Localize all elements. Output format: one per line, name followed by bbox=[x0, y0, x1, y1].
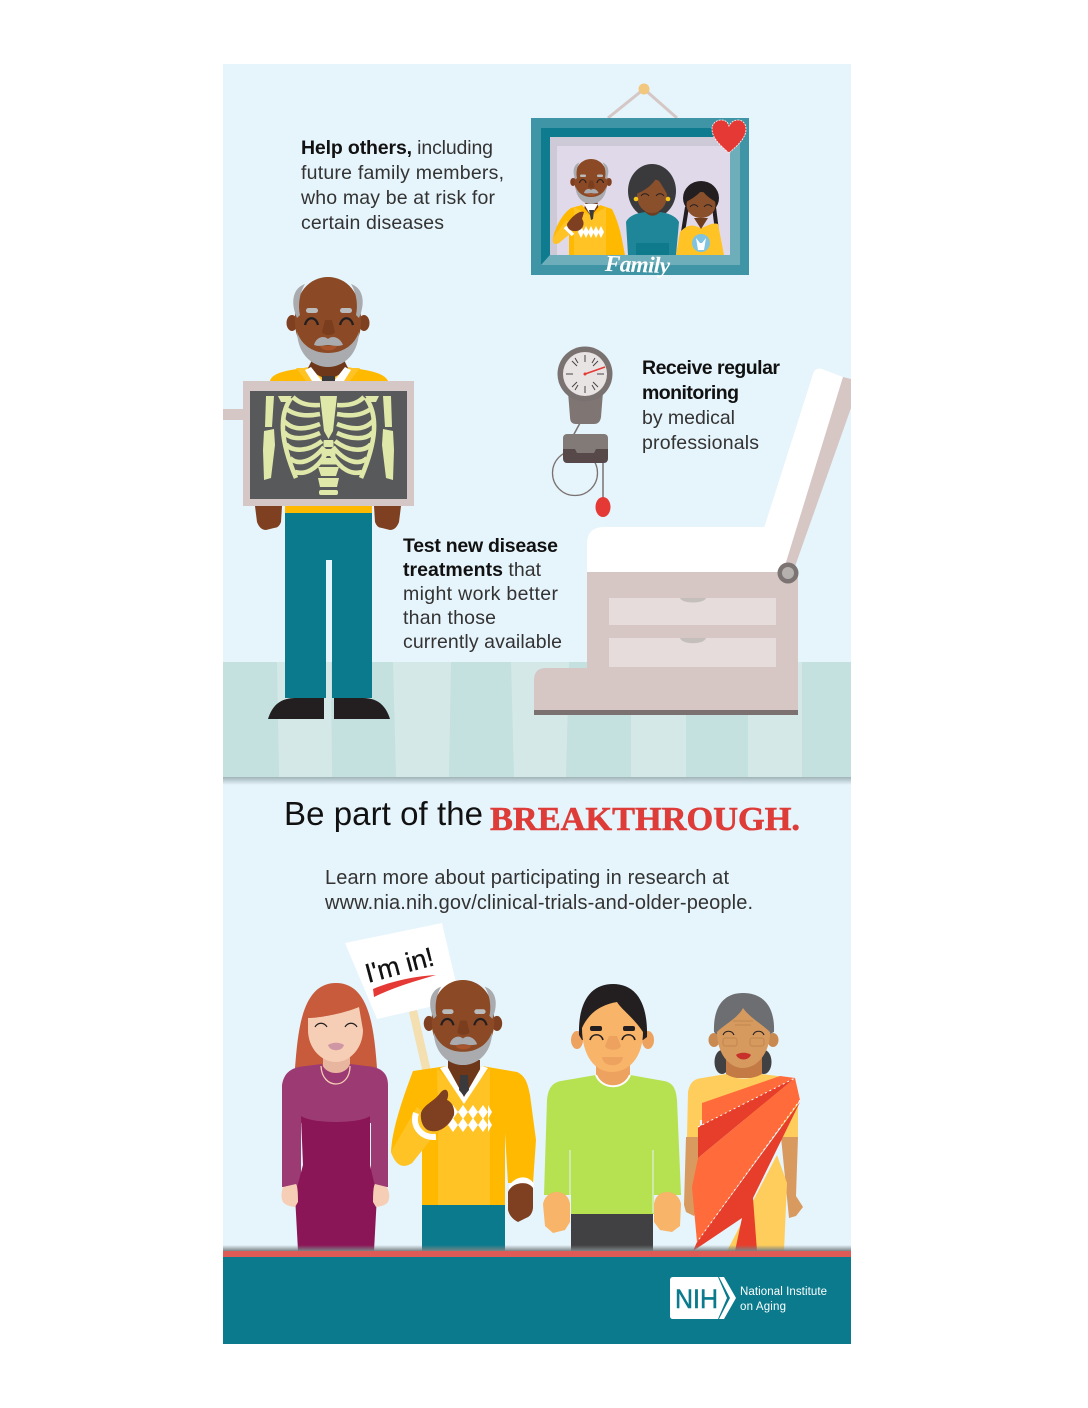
heading bbox=[284, 795, 800, 838]
text: receive regular monitoring: professionals bbox=[642, 432, 759, 454]
text: learn more bbox=[324, 867, 753, 914]
heading: BREAKTHROUGH. bbox=[490, 801, 800, 838]
figure: man holding x-ray bbox=[223, 277, 414, 719]
girl in photo bbox=[676, 181, 724, 255]
text: help others: certain diseases bbox=[301, 212, 444, 234]
text: help others: future family members, bbox=[301, 162, 504, 184]
x-ray board bbox=[243, 381, 414, 506]
text: learn more: Learn more about participating in research at bbox=[325, 867, 729, 889]
panel: background bbox=[223, 64, 851, 1344]
text: test new treatments: currently available bbox=[403, 631, 562, 653]
skirt bbox=[727, 1155, 787, 1251]
text: test new treatments: than those bbox=[403, 607, 496, 629]
footer organisation name: National Institute bbox=[740, 1286, 827, 1298]
sign: I'm in bbox=[345, 923, 460, 1143]
drawers bbox=[609, 598, 776, 625]
text: help others: Help others, including bbox=[301, 137, 493, 159]
footer bbox=[223, 1245, 851, 1344]
skeleton bbox=[263, 396, 394, 495]
sari bbox=[702, 1076, 795, 1125]
figure: young man in green sweater bbox=[543, 984, 681, 1251]
footer organisation name bbox=[740, 1286, 827, 1313]
text: test new treatments bbox=[403, 535, 562, 653]
icon: blood pressure gauge bbox=[552, 346, 612, 517]
icon: family picture frame bbox=[531, 84, 749, 278]
footer organisation name: on Aging bbox=[740, 1301, 786, 1313]
text: help others: who may be at risk for bbox=[300, 187, 496, 209]
arms bbox=[684, 1137, 700, 1216]
text: receive regular monitoring: monitoring bbox=[642, 382, 739, 404]
text: receive regular monitoring: Receive regular bbox=[642, 357, 780, 379]
exam chair bbox=[534, 369, 851, 715]
shoes bbox=[268, 698, 324, 719]
family caption: Family bbox=[604, 251, 671, 278]
text: receive regular monitoring bbox=[642, 357, 780, 454]
figure: woman with red hair bbox=[282, 983, 389, 1251]
floor bbox=[223, 662, 851, 785]
heading: Be part of the bbox=[284, 795, 483, 832]
text: test new treatments: treatments that bbox=[403, 559, 542, 581]
figure: older woman in sari bbox=[684, 993, 803, 1251]
text: help others bbox=[300, 137, 504, 234]
argyle pattern bbox=[448, 1105, 492, 1132]
wall rail bbox=[223, 409, 245, 420]
cuffs bbox=[415, 1113, 436, 1137]
NIH logo: NIH bbox=[675, 1284, 718, 1314]
figure: man in yellow sweater bbox=[391, 980, 536, 1251]
NIH logo bbox=[670, 1277, 736, 1319]
text: learn more: www.nia.nih.gov/clinical-trials-and-older-people. bbox=[324, 892, 753, 914]
blouse bbox=[687, 1074, 798, 1137]
text: receive regular monitoring: by medical bbox=[642, 407, 735, 429]
icon: heart bbox=[712, 120, 746, 153]
text: test new treatments: Test new disease bbox=[403, 535, 558, 557]
mother in photo bbox=[626, 164, 679, 255]
hands bbox=[421, 1090, 454, 1131]
grandfather in photo bbox=[553, 159, 625, 255]
text: test new treatments: might work better bbox=[403, 583, 558, 605]
sign: I'm in: I'm in! bbox=[362, 942, 437, 989]
hands bbox=[255, 506, 282, 530]
trousers bbox=[285, 513, 372, 698]
